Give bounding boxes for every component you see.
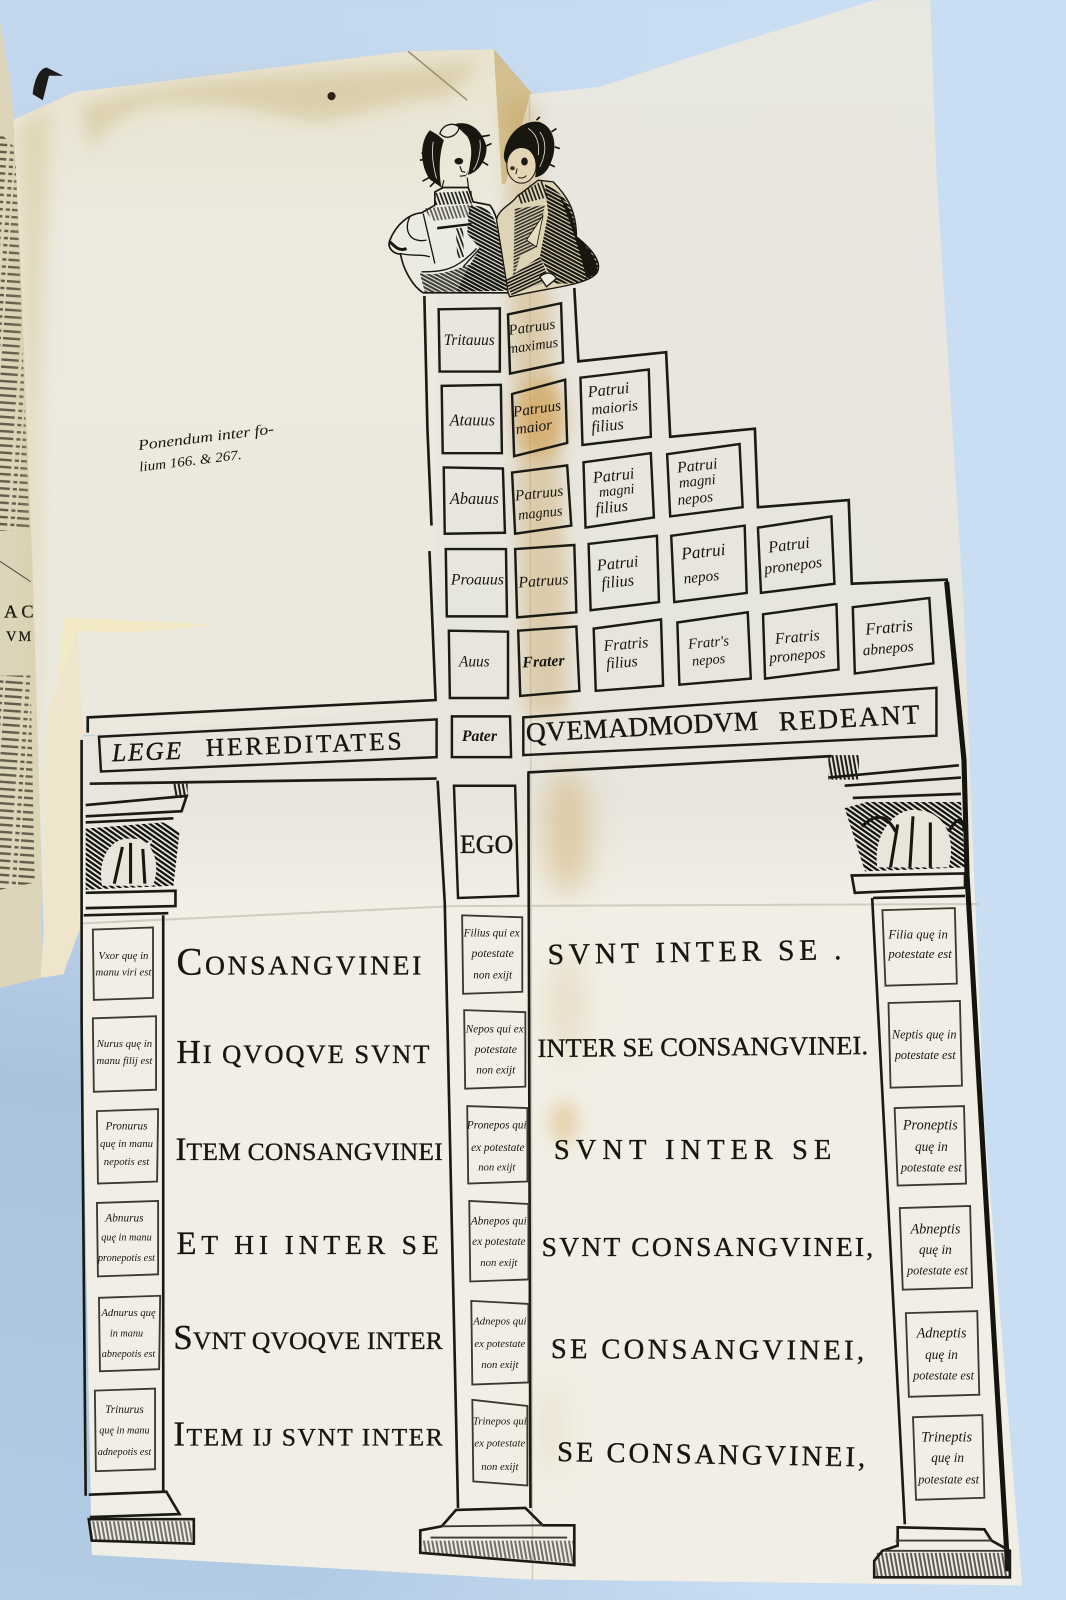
banner: QVEMADMODVM REDEANT: REDEANT bbox=[778, 698, 920, 737]
box: Pater: Pater bbox=[462, 728, 498, 745]
box: Patrui magni filius: Patrui bbox=[591, 464, 636, 487]
box: Adnepos: ex potestate bbox=[474, 1338, 526, 1350]
left page: printed text fragments bbox=[0, 133, 48, 890]
box: Adnepos: Adnepos qui bbox=[472, 1315, 526, 1327]
handwritten-style note: Ponendum inter folium: Ponendum inter fo- bbox=[136, 422, 275, 454]
box: Fratris nepos: nepos bbox=[691, 651, 726, 670]
banner: LEGE HEREDITATES: HEREDITATES bbox=[205, 726, 402, 762]
box: Abnurus bbox=[97, 1201, 158, 1276]
box: Adneptis bbox=[906, 1311, 979, 1397]
box: Fratris abnepos: abnepos bbox=[862, 638, 914, 659]
box: Abneptis: quę in bbox=[919, 1242, 952, 1257]
box: Patrui magni nepos: nepos bbox=[677, 488, 714, 509]
box: Patrui filius: filius bbox=[600, 570, 635, 592]
box: Patruus maximus: maximus bbox=[507, 335, 560, 358]
water stains along the centre fold bbox=[505, 102, 590, 1475]
box: Pronurus: quę in manu bbox=[100, 1138, 153, 1150]
box: Abnurus: pronepotis est bbox=[97, 1253, 156, 1264]
box: Trineptis bbox=[913, 1415, 984, 1500]
box: Patrui filius bbox=[589, 536, 659, 610]
box: Abnepos: non exijt bbox=[480, 1257, 518, 1269]
box: Trinurus: Trinurus bbox=[105, 1404, 144, 1416]
box: Auus bbox=[449, 631, 508, 698]
box: Adneptis: quę in bbox=[925, 1347, 958, 1362]
box: Patrui maioris filius: maioris bbox=[591, 397, 639, 419]
woodcut: two busts, husband and wife bbox=[389, 117, 599, 297]
box: Trinepos: non exijt bbox=[481, 1461, 519, 1473]
box: Patruus maior bbox=[511, 380, 567, 456]
right column base bbox=[874, 1527, 1010, 1577]
right capital with acanthus leaves bbox=[828, 755, 965, 898]
torn insert strip bbox=[41, 617, 211, 977]
box: Pronurus: nepotis est bbox=[104, 1156, 150, 1168]
box: Abauus: Abauus bbox=[449, 489, 499, 508]
box: Tritauus: Tritauus bbox=[444, 332, 495, 349]
box: Fratris pronepos: pronepos bbox=[768, 645, 826, 667]
box: Filia: Filia quę in bbox=[887, 928, 948, 942]
box: Abneptis bbox=[900, 1206, 972, 1290]
box: Patrui magni filius: filius bbox=[594, 496, 629, 518]
box: Patrui magni nepos: magni bbox=[678, 472, 717, 492]
inscription left column: ITEM IJ SVNT INTER bbox=[173, 1415, 443, 1454]
box: Filius: non exijt bbox=[473, 970, 513, 982]
left figure hair bbox=[422, 130, 444, 188]
box: Proneptis: Proneptis bbox=[902, 1117, 958, 1133]
box: Pronurus bbox=[97, 1109, 158, 1184]
bust: left figure bbox=[389, 123, 508, 293]
box: Neptis: potestate est bbox=[894, 1048, 956, 1062]
box: Trineptis: quę in bbox=[931, 1450, 964, 1465]
banner: QVEMADMODVM REDEANT bbox=[523, 688, 936, 755]
box: Nurus bbox=[93, 1016, 156, 1092]
box: Abnepos bbox=[469, 1201, 528, 1281]
box: Pronepos: ex potestate bbox=[471, 1142, 524, 1154]
box: Proneptis bbox=[895, 1106, 966, 1186]
box: Trinurus: adnepotis est bbox=[98, 1447, 152, 1458]
box: Patrui nepos bbox=[671, 526, 747, 602]
box: Pronurus: Pronurus bbox=[104, 1120, 148, 1132]
bound book: left page block bbox=[0, 21, 48, 988]
box: Trineptis: potestate est bbox=[917, 1472, 980, 1486]
box: Patrui pronepos: Patrui bbox=[766, 533, 811, 557]
box: Patrui pronepos bbox=[758, 516, 834, 593]
box: Adnurus: abnepotis est bbox=[102, 1349, 156, 1360]
box: Neptis: Neptis quę in bbox=[891, 1028, 956, 1042]
box: Proauus: Proauus bbox=[450, 572, 504, 589]
box: Vxor: Vxor quę in bbox=[98, 950, 148, 962]
box: Patrui filius: Patrui bbox=[595, 551, 640, 575]
box: Patrui pronepos: pronepos bbox=[762, 554, 823, 578]
box: Filius: potestate bbox=[471, 947, 514, 960]
banner: LEGE HEREDITATES bbox=[99, 719, 437, 771]
box: Pater bbox=[452, 716, 511, 757]
left column base bbox=[89, 1492, 194, 1544]
bust: right figure bbox=[497, 117, 599, 297]
right figure hair bbox=[507, 147, 536, 183]
box: Patruus maior: Patruus bbox=[511, 397, 562, 421]
box: Filia: potestate est bbox=[887, 947, 952, 961]
box: Trinepos: ex potestate bbox=[474, 1438, 526, 1450]
box: Patruus magnus bbox=[512, 465, 571, 534]
left page: printed text fragments: ACI bbox=[4, 601, 48, 621]
box: Auus: Auus bbox=[458, 653, 490, 670]
inscription right column: SVNT CONSANGVINEI, bbox=[542, 1231, 873, 1262]
box: Trineptis: Trineptis bbox=[921, 1430, 972, 1446]
box: Abneptis: Abneptis bbox=[909, 1222, 961, 1238]
box: Abnepos: ex potestate bbox=[472, 1236, 525, 1248]
box: Patruus: Patruus bbox=[517, 571, 569, 592]
box: Frater bbox=[518, 627, 579, 696]
box: Filia bbox=[882, 908, 957, 986]
box: Abauus bbox=[444, 467, 505, 534]
left page: printed text fragments: VM bbox=[6, 629, 33, 645]
box: Fratris nepos: Fratr's bbox=[687, 633, 730, 653]
box: Vxor bbox=[93, 928, 153, 1000]
box: Patrui nepos: Patrui bbox=[679, 540, 726, 564]
box: Patrui maioris filius: Patrui bbox=[586, 378, 631, 401]
inscription right column: SVNT INTER SE . bbox=[547, 934, 842, 971]
inscription left column: HI QVOQVE SVNT bbox=[176, 1034, 429, 1071]
box: Patrui magni filius: magni bbox=[598, 481, 635, 501]
box: Patrui maioris filius: filius bbox=[590, 414, 625, 436]
box: Pronepos bbox=[466, 1106, 527, 1184]
box: Patrui magni filius bbox=[583, 453, 654, 528]
box: Fratris filius: Fratris bbox=[602, 634, 649, 655]
box: Patruus maximus bbox=[507, 303, 563, 374]
box: Filius bbox=[462, 915, 522, 994]
box: Adnurus bbox=[99, 1296, 160, 1371]
box: Atauus: Atauus bbox=[449, 411, 495, 430]
stepped frame of the family tree bbox=[88, 288, 965, 784]
left page of the book bbox=[13, 49, 532, 977]
inscription left column: ET HI INTER SE bbox=[176, 1226, 439, 1262]
box: Adnepos bbox=[471, 1301, 528, 1385]
box: Vxor: manu viri est bbox=[95, 966, 152, 978]
box: Adnepos: non exijt bbox=[481, 1359, 519, 1371]
box: Patruus magnus: Patruus bbox=[513, 483, 564, 505]
box: Adnurus: Adnurus quę bbox=[100, 1307, 156, 1319]
centre column boxes bbox=[462, 915, 528, 1486]
box: Fratris pronepos bbox=[763, 604, 839, 679]
box: Trinepos: Trinepos qui bbox=[473, 1415, 527, 1427]
box: Abnurus: Abnurus bbox=[104, 1212, 144, 1224]
box: Abneptis: potestate est bbox=[906, 1263, 968, 1277]
centre column base bbox=[420, 1508, 574, 1565]
box: Nepos: non exijt bbox=[476, 1064, 516, 1076]
box: Pronepos: non exijt bbox=[478, 1161, 516, 1173]
box: EGO bbox=[454, 786, 518, 898]
banner: LEGE HEREDITATES: LEGE bbox=[110, 736, 182, 767]
box: Patrui maioris filius bbox=[580, 370, 651, 445]
box: Trinurus: quę in manu bbox=[99, 1425, 150, 1436]
box: Patruus bbox=[515, 545, 576, 617]
box: Fratris abnepos: Fratris bbox=[863, 616, 914, 639]
box: Proneptis: quę in bbox=[915, 1139, 948, 1154]
inscription right column: SE CONSANGVINEI, bbox=[557, 1437, 865, 1473]
box: Fratris filius bbox=[594, 619, 663, 691]
box: Fratris filius: filius bbox=[605, 653, 638, 673]
box: Fratris nepos bbox=[677, 612, 751, 685]
box: Nepos: Nepos qui ex bbox=[465, 1024, 524, 1036]
inscription right column: SE CONSANGVINEI, bbox=[551, 1334, 864, 1367]
pillar lines bbox=[82, 582, 1008, 1571]
inscription left column: CONSANGVINEI bbox=[176, 940, 421, 983]
box: Trinepos bbox=[472, 1400, 527, 1486]
box: Neptis bbox=[889, 1001, 962, 1088]
box: Proauus bbox=[446, 549, 507, 616]
box: Abnurus: quę in manu bbox=[101, 1233, 152, 1244]
box: Patruus magnus: magnus bbox=[517, 503, 564, 524]
box: Fratris pronepos: Fratris bbox=[773, 627, 820, 648]
inscription left column bbox=[173, 940, 443, 1454]
box: EGO: EGO bbox=[460, 830, 513, 859]
banner: QVEMADMODVM REDEANT: QVEMADMODVM bbox=[525, 705, 759, 748]
box: Adnurus: in manu bbox=[110, 1329, 143, 1340]
handwritten-style note: Ponendum inter folium: lium 166. & 267. bbox=[138, 447, 242, 475]
box: Frater: Frater bbox=[521, 652, 566, 672]
box: Patrui magni nepos: Patrui bbox=[675, 455, 718, 477]
box: Atauus bbox=[442, 385, 502, 453]
inscription right column bbox=[537, 934, 873, 1473]
box: Patrui magni nepos bbox=[667, 444, 743, 516]
box: Tritauus bbox=[439, 308, 500, 372]
box: Adneptis: Adneptis bbox=[916, 1326, 967, 1342]
box: Patruus maior: maior bbox=[515, 416, 553, 438]
box: Pronepos: Pronepos qui bbox=[466, 1119, 527, 1131]
box: Nurus: manu filij est bbox=[96, 1055, 153, 1067]
box: Patruus maximus: Patruus bbox=[507, 317, 556, 339]
box: Patrui nepos: nepos bbox=[683, 567, 720, 588]
box: Nepos: potestate bbox=[474, 1043, 517, 1056]
inscription right column: INTER SE CONSANGVINEI. bbox=[537, 1030, 868, 1063]
box: Abnepos: Abnepos qui bbox=[470, 1215, 527, 1227]
box: Nepos bbox=[464, 1010, 525, 1089]
inscription right column: SVNT INTER SE bbox=[554, 1135, 831, 1166]
inscription left column: ITEM CONSANGVINEI bbox=[175, 1132, 443, 1168]
box: Fratris abnepos bbox=[853, 598, 933, 674]
left capital with acanthus leaves bbox=[84, 784, 188, 915]
right column boxes bbox=[882, 908, 984, 1500]
box: Trinurus bbox=[95, 1389, 155, 1471]
box: Filius: Filius qui ex bbox=[463, 928, 520, 940]
box: Proneptis: potestate est bbox=[900, 1160, 962, 1174]
inscription left column: SVNT QVOQVE INTER bbox=[173, 1318, 443, 1357]
box: Nurus: Nurus quę in bbox=[96, 1038, 152, 1050]
handwritten-style note: Ponendum inter folium bbox=[136, 422, 275, 475]
left column boxes bbox=[93, 928, 160, 1471]
box: Adneptis: potestate est bbox=[912, 1368, 975, 1382]
